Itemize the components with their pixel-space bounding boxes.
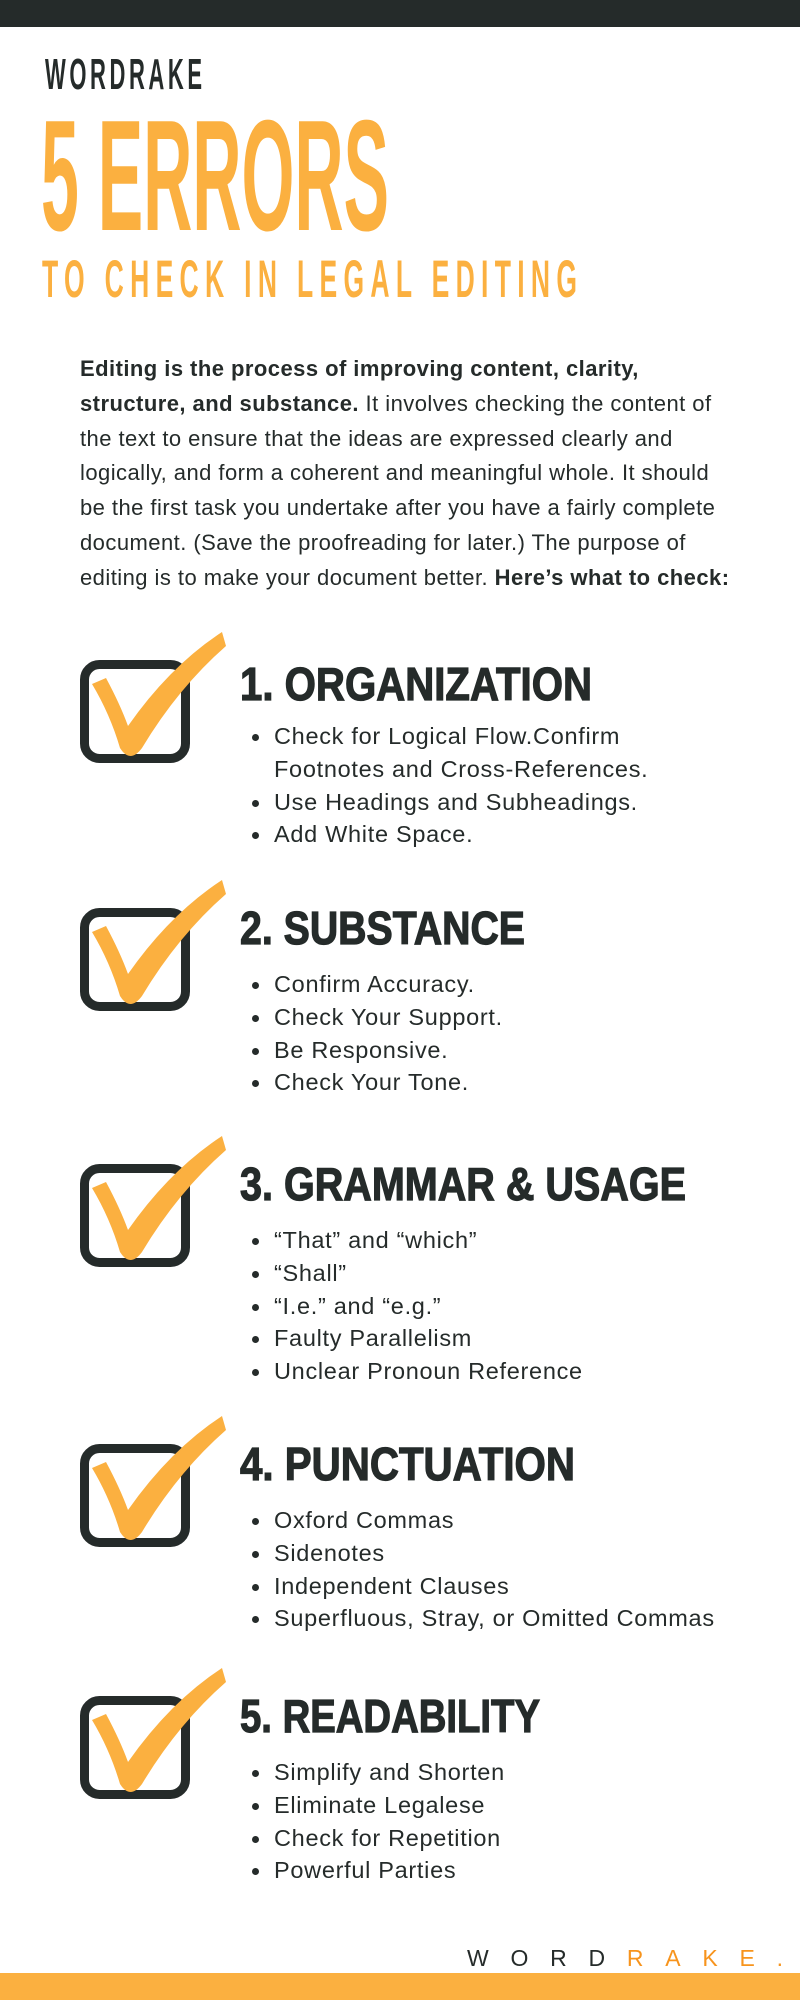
- bullet list: [252, 723, 648, 847]
- bullet list: Powerful Parties: [274, 1857, 456, 1883]
- icon: checkbox: [80, 1416, 226, 1547]
- bullet list: Check Your Support.: [274, 1004, 503, 1030]
- icon: checkbox: [80, 880, 226, 1011]
- bullet list: Footnotes and Cross-References.: [274, 756, 648, 782]
- intro paragraph: [80, 356, 730, 590]
- section 2: substance: [80, 880, 525, 1095]
- bullet list: Be Responsive.: [274, 1037, 448, 1063]
- bullet list: Confirm Accuracy.: [274, 971, 475, 997]
- bullet list: Simplify and Shorten: [274, 1759, 505, 1785]
- icon: checkbox: [80, 632, 226, 763]
- bullet list: [252, 1759, 505, 1883]
- section 3: grammar & usage: [80, 1136, 686, 1384]
- intro paragraph: Editing is the process of improving content, clarity,: [80, 356, 639, 381]
- bullet list: Faulty Parallelism: [274, 1325, 472, 1351]
- bullet list: Independent Clauses: [274, 1573, 509, 1599]
- bullet list: Add White Space.: [274, 821, 473, 847]
- bullet list: Oxford Commas: [274, 1507, 454, 1533]
- subtitle: TO CHECK IN LEGAL EDITING: [42, 249, 577, 308]
- section 5: readability: [80, 1668, 540, 1883]
- bullet list: Check Your Tone.: [274, 1069, 469, 1095]
- header: [41, 51, 577, 308]
- intro paragraph: structure, and substance. It involves checking the content of: [80, 391, 712, 416]
- bullet list: Eliminate Legalese: [274, 1792, 485, 1818]
- icon: checkbox: [80, 1136, 226, 1267]
- bullet list: Superfluous, Stray, or Omitted Commas: [274, 1605, 715, 1631]
- section 1: organization: [80, 632, 648, 847]
- bullet list: “I.e.” and “e.g.”: [274, 1293, 441, 1319]
- bullet list: [252, 1227, 583, 1384]
- intro paragraph: document. (Save the proofreading for later.) The purpose of: [80, 530, 686, 555]
- section 4: punctuation: [80, 1416, 715, 1631]
- icon: checkbox: [80, 1668, 226, 1799]
- footer bar: [0, 1973, 800, 2000]
- intro paragraph: be the first task you undertake after you have a fairly complete: [80, 495, 715, 520]
- bullet list: Unclear Pronoun Reference: [274, 1358, 583, 1384]
- intro paragraph: editing is to make your document better. Here’s what to check:: [80, 565, 730, 590]
- bullet list: Check for Logical Flow.Confirm: [274, 723, 620, 749]
- bullet list: “Shall”: [274, 1260, 347, 1286]
- bullet list: [252, 971, 503, 1095]
- bullet list: “That” and “which”: [274, 1227, 477, 1253]
- brand name: WORDRAKE: [45, 51, 202, 99]
- intro paragraph: the text to ensure that the ideas are expressed clearly and: [80, 426, 673, 451]
- bullet list: Use Headings and Subheadings.: [274, 789, 638, 815]
- bullet list: Check for Repetition: [274, 1825, 501, 1851]
- top bar: [0, 0, 800, 27]
- intro paragraph: logically, and form a coherent and meaningful whole. It should: [80, 460, 709, 485]
- bullet list: [252, 1507, 715, 1631]
- bullet list: Sidenotes: [274, 1540, 385, 1566]
